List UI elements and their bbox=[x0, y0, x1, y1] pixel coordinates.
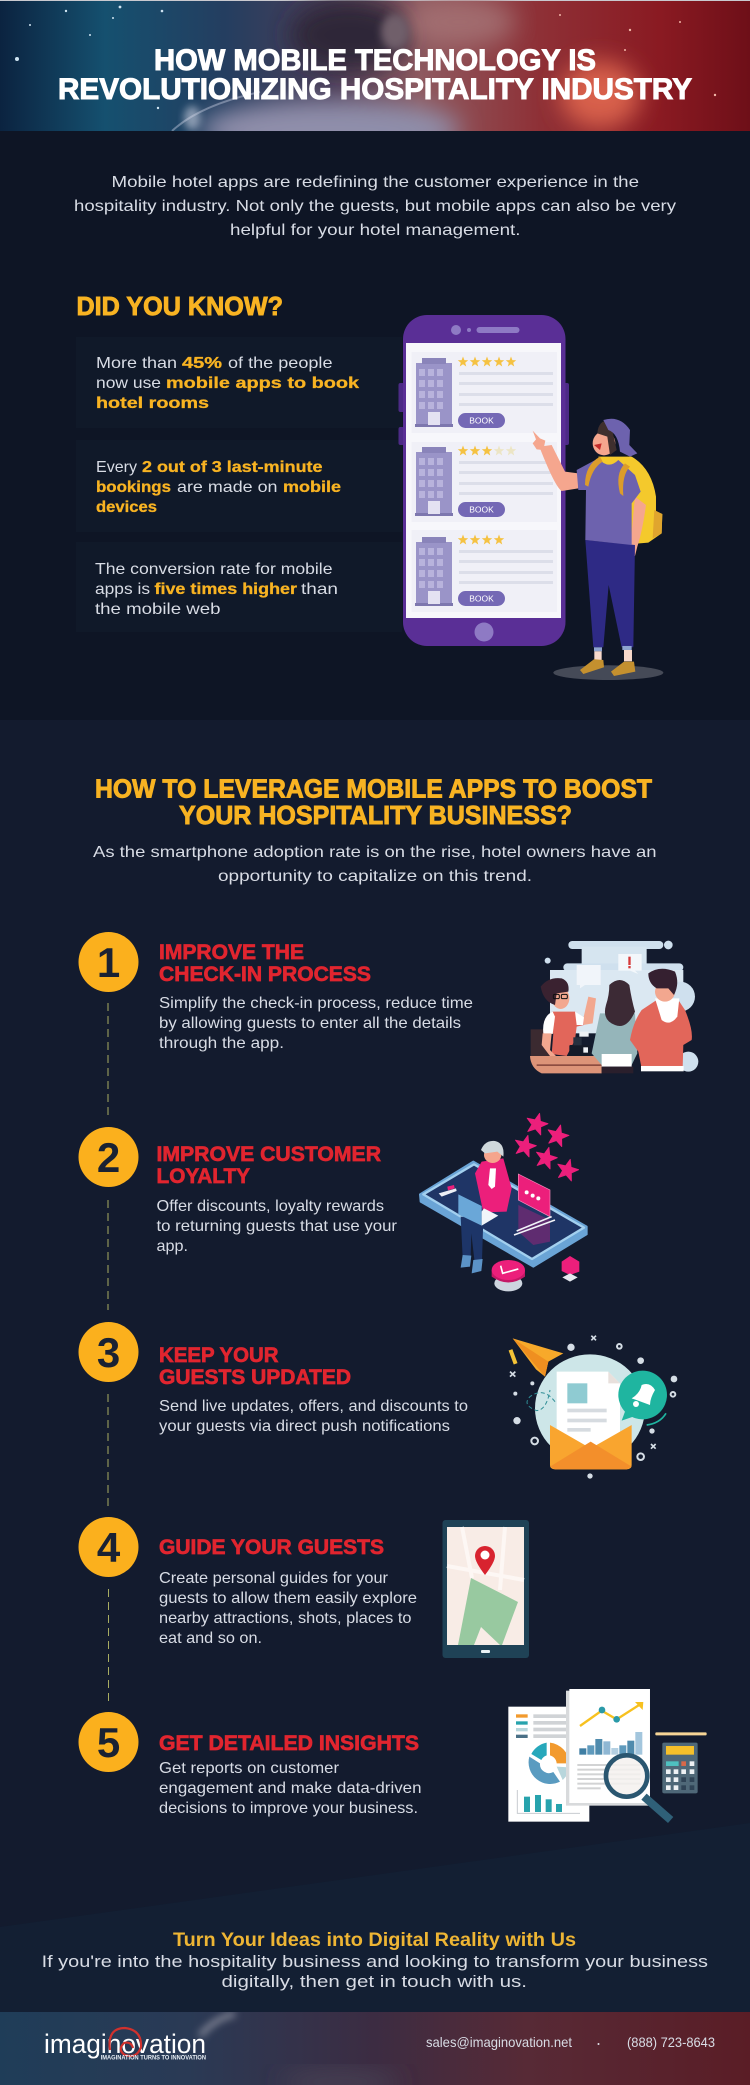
panel: fact two: Every bbox=[96, 459, 137, 476]
panel: fact one: now use bbox=[96, 375, 161, 392]
step one badge: 1 bbox=[97, 939, 120, 986]
step one heading: IMPROVE THE bbox=[159, 941, 304, 964]
step four text: nearby attractions, shots, places to bbox=[159, 1610, 412, 1627]
step five badge: 5 bbox=[97, 1719, 120, 1766]
header banner bbox=[0, 0, 750, 131]
step one badge bbox=[78, 932, 138, 992]
panel: fact three: the mobile web bbox=[95, 601, 221, 618]
intro text: helpful for your hotel management. bbox=[230, 222, 520, 239]
panel: fact two bbox=[76, 440, 402, 532]
step two bbox=[78, 1127, 398, 1255]
step two text: Offer discounts, loyalty rewards bbox=[156, 1198, 384, 1215]
panel: fact one: hotel rooms bbox=[96, 395, 209, 412]
step four badge bbox=[78, 1517, 138, 1577]
hotel card three bbox=[412, 530, 557, 612]
step one bbox=[78, 932, 473, 1052]
step two text: app. bbox=[156, 1238, 188, 1255]
step three heading: KEEP YOUR bbox=[159, 1344, 278, 1367]
step three badge bbox=[78, 1322, 138, 1382]
step four heading: GUIDE YOUR GUESTS bbox=[159, 1536, 384, 1559]
hotel card one bbox=[412, 352, 557, 433]
title: REVOLUTIONIZING HOSPITALITY INDUSTRY bbox=[58, 73, 692, 106]
call to action: digitally, then get in touch with us. bbox=[222, 1972, 527, 1991]
step one heading bbox=[159, 941, 371, 986]
step connectors bbox=[107, 1003, 110, 1702]
hotel card two bbox=[412, 442, 557, 522]
step four bbox=[78, 1517, 417, 1647]
section intro text: As the smartphone adoption rate is on the rise, hotel owners have an bbox=[93, 844, 656, 861]
panel: fact two: are made on bbox=[177, 479, 278, 496]
contact details: (888) 723-8643 bbox=[627, 2034, 715, 2050]
panel: fact three bbox=[76, 542, 402, 632]
illustration: hotel check-in desk bbox=[530, 941, 698, 1073]
intro text: hospitality industry. Not only the guests, but mobile apps can also be very bbox=[74, 198, 676, 215]
intro text: Mobile hotel apps are redefining the customer experience in the bbox=[112, 174, 639, 191]
panel: fact one bbox=[76, 337, 402, 428]
call to action: Turn Your Ideas into Digital Reality with Us bbox=[173, 1930, 576, 1951]
step three text bbox=[159, 1398, 468, 1435]
step two badge bbox=[78, 1127, 138, 1187]
heading: how to leverage: YOUR HOSPITALITY BUSINESS? bbox=[179, 800, 572, 830]
step two badge: 2 bbox=[97, 1134, 120, 1181]
hotel card one: BOOK bbox=[469, 416, 494, 426]
step three bbox=[78, 1322, 468, 1435]
contact details bbox=[426, 2034, 715, 2050]
step four text bbox=[159, 1570, 417, 1647]
step four badge: 4 bbox=[97, 1524, 121, 1571]
title bbox=[58, 44, 692, 106]
traveller figure with backpack bbox=[533, 419, 663, 680]
step four text: eat and so on. bbox=[159, 1630, 262, 1647]
step one text: through the app. bbox=[159, 1035, 284, 1052]
step one heading: CHECK-IN PROCESS bbox=[159, 963, 371, 986]
step four text: guests to allow them easily explore bbox=[159, 1590, 417, 1607]
illustration: envelope and notifications bbox=[509, 1336, 677, 1479]
section intro text bbox=[93, 844, 656, 885]
step three text: your guests via direct push notifications bbox=[159, 1418, 450, 1435]
step two heading: LOYALTY bbox=[156, 1165, 250, 1188]
step one text: Simplify the check-in process, reduce time bbox=[159, 995, 473, 1012]
panel: fact two: bookings bbox=[96, 479, 171, 496]
phone illustration bbox=[398, 315, 569, 646]
step one text bbox=[159, 995, 473, 1052]
step five bbox=[78, 1712, 422, 1817]
heading: how to leverage: HOW TO LEVERAGE MOBILE APPS TO BOOST bbox=[95, 774, 652, 804]
step four text: Create personal guides for your bbox=[159, 1570, 389, 1587]
step two text bbox=[156, 1198, 398, 1255]
step five text: decisions to improve your business. bbox=[159, 1800, 418, 1817]
panel: fact one: More than bbox=[96, 355, 177, 372]
step two heading: IMPROVE CUSTOMER bbox=[156, 1143, 381, 1166]
step five text: Get reports on customer bbox=[159, 1760, 340, 1777]
panel: fact two: 2 out of 3 last-minute bbox=[142, 459, 323, 476]
panel: fact two: mobile bbox=[283, 479, 341, 496]
illustration: map tablet bbox=[442, 1520, 529, 1658]
step five text: engagement and make data-driven bbox=[159, 1780, 422, 1797]
logo: IMAGINATION TURNS TO INNOVATION bbox=[101, 2054, 206, 2062]
step three heading bbox=[159, 1344, 351, 1389]
call to action: If you're into the hospitality business and looking to transform your business bbox=[42, 1952, 708, 1971]
panel: fact two: devices bbox=[96, 499, 157, 516]
illustration: reports and calculator bbox=[508, 1689, 707, 1822]
step two heading bbox=[156, 1143, 381, 1188]
intro text bbox=[74, 174, 676, 239]
step five badge bbox=[78, 1712, 138, 1772]
step one text: by allowing guests to enter all the details bbox=[159, 1015, 461, 1032]
footer banner bbox=[0, 2012, 750, 2085]
call to action bbox=[42, 1930, 708, 1991]
illustration: loyalty phone with stars bbox=[420, 1111, 587, 1291]
step five heading: GET DETAILED INSIGHTS bbox=[159, 1732, 419, 1755]
step five text bbox=[159, 1760, 422, 1817]
hotel card three: BOOK bbox=[469, 594, 494, 604]
step three text: Send live updates, offers, and discounts to bbox=[159, 1398, 468, 1415]
heading: how to leverage bbox=[95, 774, 652, 830]
logo: imaginovation bbox=[44, 2029, 206, 2059]
panel: fact one: 45% bbox=[182, 355, 222, 372]
panel: fact three: The conversion rate for mobile bbox=[95, 561, 333, 578]
map pin bbox=[475, 1546, 495, 1575]
panel: fact one: of the people bbox=[228, 355, 333, 372]
panel: fact three: apps is bbox=[95, 581, 150, 598]
hotel card two: BOOK bbox=[469, 504, 494, 514]
heading: did you know: DID YOU KNOW? bbox=[76, 291, 283, 321]
contact details: sales@imaginovation.net bbox=[426, 2034, 572, 2050]
panel: fact one: mobile apps to book bbox=[166, 375, 359, 392]
step three heading: GUESTS UPDATED bbox=[159, 1366, 351, 1389]
step two text: to returning guests that use your bbox=[156, 1218, 398, 1235]
panel: fact three: than bbox=[301, 581, 338, 598]
title: HOW MOBILE TECHNOLOGY IS bbox=[154, 44, 596, 77]
step three badge: 3 bbox=[97, 1329, 120, 1376]
panel: fact three: five times higher bbox=[154, 581, 297, 598]
section intro text: opportunity to capitalize on this trend. bbox=[218, 868, 532, 885]
